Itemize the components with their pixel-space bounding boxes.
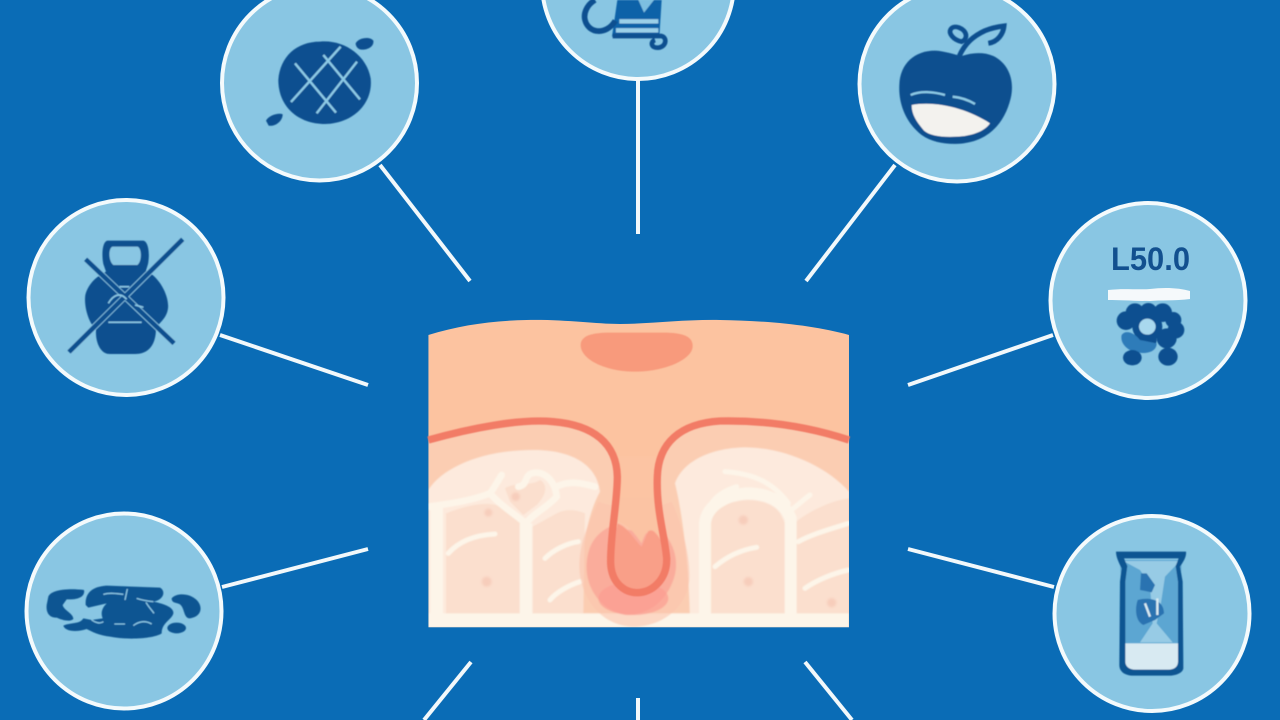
icon: mug with handle (585, 0, 665, 48)
icon: broken chain blobs (47, 586, 201, 639)
icon: crossed round blob (266, 38, 373, 126)
circle: bottom right, hourglass jar icon (1054, 516, 1250, 711)
white fat strands (428, 472, 848, 617)
icon: jar with hourglass (1116, 552, 1186, 676)
left fat lobe (428, 450, 600, 627)
skin cross-section illustration (420, 310, 860, 640)
circle: middle left, crossed kettlebell icon (28, 200, 224, 395)
surface lesion (581, 333, 693, 372)
dermis layer (428, 423, 849, 627)
circle: top left, crossed blob icon (222, 0, 417, 180)
connector lines (220, 80, 1054, 720)
skin boundary line (428, 421, 849, 593)
circle: top centre, mug icon (542, 0, 734, 79)
circle: middle right, L50.0 label with gear icon (1050, 203, 1246, 398)
small pores (482, 492, 836, 607)
inflammation halo (579, 526, 690, 627)
bottom white band (428, 613, 849, 627)
follicle bulb inner (614, 524, 663, 588)
white band (1108, 288, 1190, 301)
right fat lobe (675, 447, 849, 627)
left cells (446, 480, 585, 613)
icon: kettlebell crossed out (69, 239, 183, 354)
icon: gear shaped blob (1117, 303, 1184, 366)
circle: top right, apple icon (860, 0, 1054, 182)
icon: apple (899, 26, 1012, 144)
label: L50.0: L50.0 (1111, 241, 1190, 277)
right cells (711, 498, 849, 613)
circle: bottom left, chain blobs icon (26, 514, 222, 708)
hair shaft interior (620, 477, 654, 496)
epidermis base (428, 320, 849, 628)
